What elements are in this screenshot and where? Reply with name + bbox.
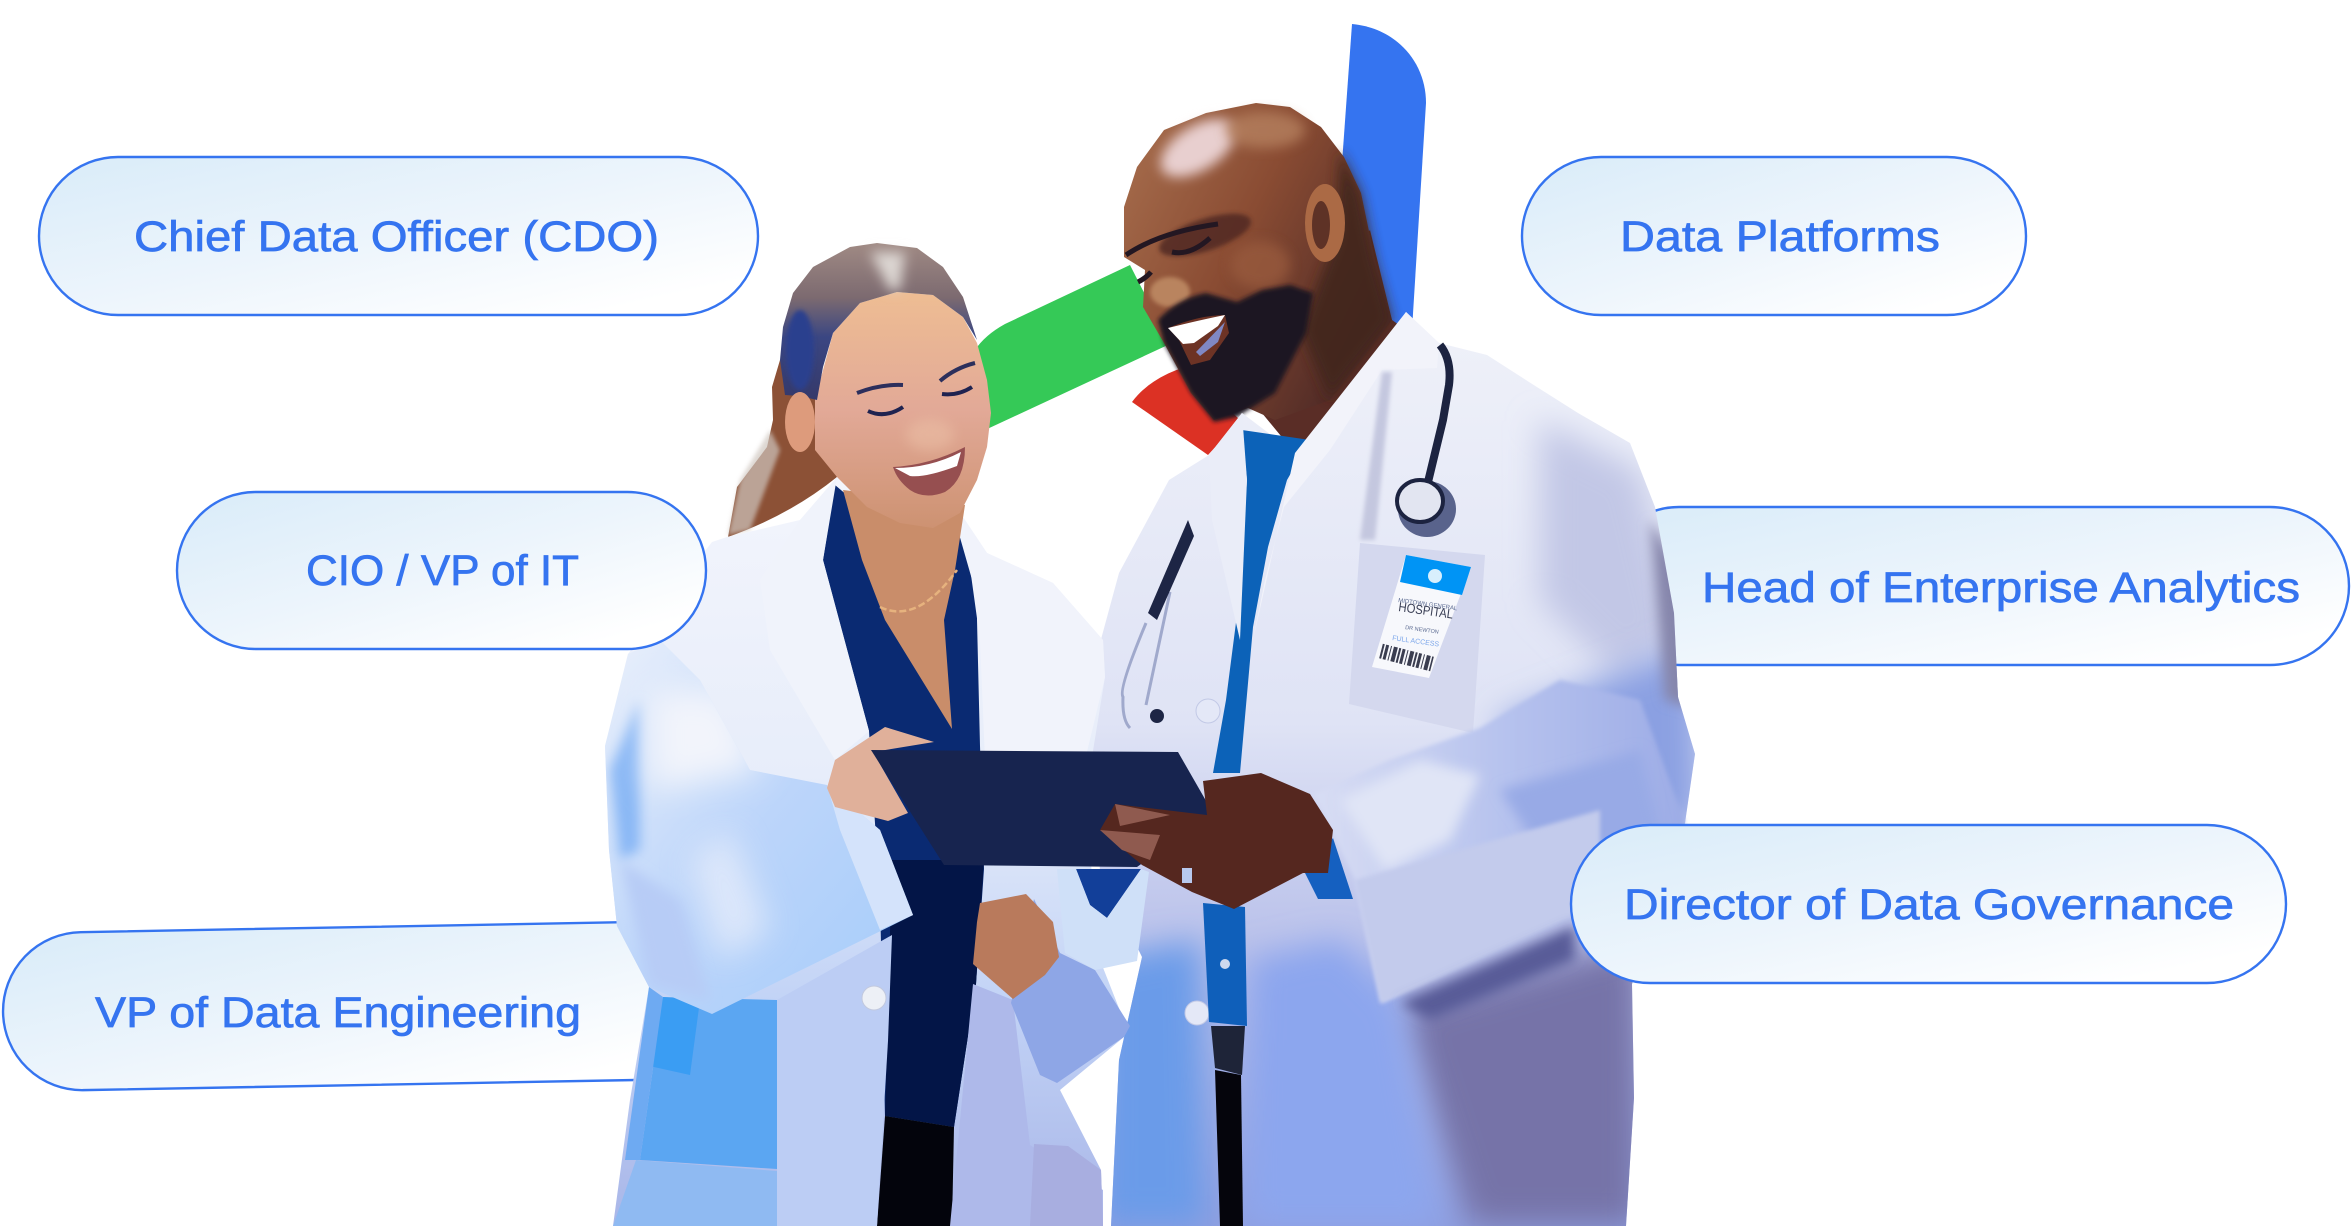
lower left blue shade <box>1100 940 1205 1226</box>
ear <box>1305 184 1345 262</box>
man coat <box>1085 312 1700 1226</box>
shoulder lavender <box>1540 420 1680 680</box>
ID badge: DR NEWTON <box>1405 625 1439 636</box>
lower right purple shadow <box>1400 940 1640 1226</box>
ID badge: HOSPITAL <box>1398 599 1454 622</box>
right lapel <box>1253 312 1439 640</box>
mouth <box>893 447 965 496</box>
logo shape: green blade <box>975 265 1170 430</box>
forehead highlight <box>1151 107 1245 189</box>
logo shape: blue blade <box>1330 24 1426 330</box>
label: Data Platforms: Data Platforms <box>1620 213 1940 261</box>
ID badge <box>1372 555 1471 678</box>
teeth <box>1168 315 1225 344</box>
brows <box>857 363 975 393</box>
hair <box>780 243 977 400</box>
shirt button <box>1220 959 1230 969</box>
ID badge: FULL ACCESS <box>1392 635 1440 649</box>
right panel lower <box>950 984 1103 1226</box>
left sleeve <box>605 640 913 1014</box>
left edge blue <box>625 987 663 1160</box>
pill: Chief Data Officer <box>39 157 758 315</box>
stethoscope <box>1122 345 1456 728</box>
right pocket lavender <box>1030 1144 1103 1226</box>
man shirt glimpse <box>1076 869 1141 918</box>
coat button <box>862 986 886 1010</box>
shirt lower <box>1203 903 1247 1026</box>
cuff <box>1355 810 1600 1003</box>
lapel shadow <box>1360 372 1392 540</box>
pocket hem <box>613 1160 777 1226</box>
left lapel <box>1209 413 1247 640</box>
upper arm blue <box>1500 640 1700 830</box>
back of head shadow <box>1300 150 1392 400</box>
pill: Head of Enterprise Analytics <box>1600 507 2349 665</box>
man shirt cuff <box>1305 838 1353 899</box>
logo shape: red blade <box>1132 367 1240 455</box>
ponytail <box>728 360 837 537</box>
pocket <box>1349 543 1485 733</box>
ear <box>785 392 815 452</box>
forehead glow <box>1225 112 1305 148</box>
pocket <box>640 997 777 1169</box>
neck and chest <box>843 490 965 729</box>
lower middle blue <box>1245 940 1440 1226</box>
blue hair sheen <box>786 310 814 390</box>
nose shade <box>906 419 954 451</box>
mouth <box>1168 315 1229 365</box>
tongue <box>1196 322 1225 356</box>
man hand <box>1100 773 1333 909</box>
teeth <box>895 452 961 476</box>
pill: Director of Data Governance <box>1571 825 2286 983</box>
woman right sleeve <box>1011 899 1130 1083</box>
woman pointing hand <box>827 727 934 821</box>
man neck <box>1240 230 1406 453</box>
left lapel <box>760 477 869 760</box>
fingers <box>1100 804 1170 860</box>
cheek glow <box>1230 241 1290 289</box>
label: Director of Data Governance: Director of Data Governance <box>1624 881 2234 929</box>
label: Chief Data Officer (CDO): Chief Data Officer (CDO) <box>134 213 659 261</box>
brow and closed eyes <box>1126 224 1218 282</box>
label: CIO / VP of IT: CIO / VP of IT <box>306 547 579 595</box>
woman face <box>815 292 991 528</box>
label: VP of Data Engineering: VP of Data Engineering <box>95 989 581 1037</box>
shirt upper <box>1213 430 1310 773</box>
eyes <box>868 387 972 414</box>
belt <box>1211 1026 1245 1075</box>
ID badge: MIDTOWN GENERAL <box>1398 598 1458 612</box>
pill: CIO / VP of IT <box>177 492 706 649</box>
label: Head of Enterprise Analytics: Head of Enterprise Analytics <box>1702 564 2300 612</box>
pill: Data Platforms <box>1522 157 2026 315</box>
woman right cuff <box>1057 869 1149 970</box>
necklace <box>880 570 957 611</box>
trousers <box>1215 1070 1243 1226</box>
ring <box>1182 868 1192 883</box>
tablet <box>871 750 1213 867</box>
center left panel <box>777 935 892 1226</box>
lower dark shirt <box>885 860 984 1127</box>
nose highlight <box>1150 277 1190 307</box>
coat buttons <box>1185 699 1220 1025</box>
hair halo <box>728 430 780 535</box>
man sleeve <box>1314 680 1685 1003</box>
barcode <box>1381 651 1432 664</box>
navy shirt <box>823 485 984 1127</box>
right edge dark <box>1644 521 1682 711</box>
pocket flap glow <box>645 997 700 1075</box>
cuff <box>827 785 913 930</box>
sleeve shadow <box>1400 925 1575 1020</box>
man head <box>1124 103 1392 422</box>
right coat panel top <box>963 517 1105 760</box>
woman coat <box>605 477 1149 1226</box>
pill: VP of Data Engineering <box>2 920 724 1092</box>
hair highlight <box>870 252 905 290</box>
cheek shade <box>1154 205 1256 265</box>
beard <box>1158 285 1313 422</box>
woman doctor <box>605 243 1149 1226</box>
woman right fist <box>973 894 1059 999</box>
trousers <box>877 1116 954 1226</box>
